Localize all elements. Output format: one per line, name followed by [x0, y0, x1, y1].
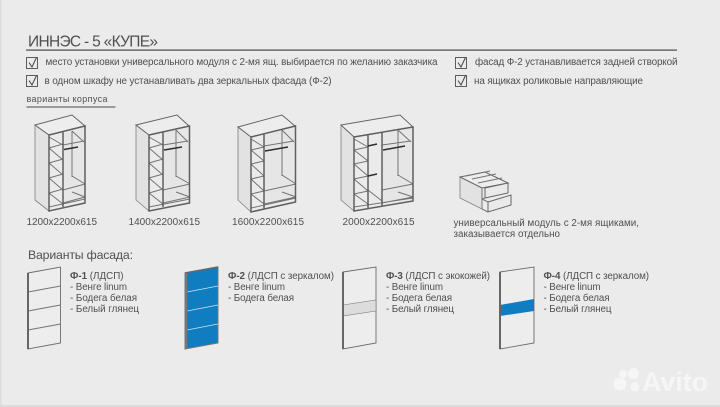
- facade F-2 text: - Бодега белая: [228, 293, 294, 304]
- note: facade F-2 rear: фасад Ф-2 устанавливается задней створкой: [475, 57, 678, 68]
- facade F-1 text: - Белый глянец: [70, 304, 139, 315]
- module caption: [454, 218, 639, 240]
- wardrobe 2000: [341, 115, 413, 211]
- facade F-1 text: - Бодега белая: [70, 293, 137, 304]
- facade F-1 text: Ф-1 (ЛДСП): [70, 271, 124, 282]
- facade F-4 text: - Венге linum: [544, 282, 600, 293]
- facade F-3 text: - Белый глянец: [386, 304, 454, 315]
- title: ИННЭС - 5 «КУПЕ»: [28, 34, 158, 50]
- facade F-2 door: [184, 267, 218, 349]
- facade F-2 text: Ф-2 (ЛДСП с зеркалом): [228, 271, 334, 282]
- watermark: Avito logo: [614, 367, 708, 397]
- note: module position: место установки универсального модуля с 2-мя ящ. выбирается по желанию заказчика: [46, 57, 438, 68]
- facade F-3 text: Ф-3 (ЛДСП с экокожей): [386, 271, 490, 282]
- facade F-4 text: - Белый глянец: [544, 304, 612, 315]
- facade F-2 text: [228, 271, 334, 304]
- wardrobe 1400: [136, 115, 190, 211]
- wardrobe 1600: [238, 115, 296, 212]
- facade F-4 text: - Бодега белая: [544, 293, 610, 304]
- module caption: универсальный модуль с 2-мя ящиками,: [454, 218, 639, 229]
- facade F-4 door: [499, 267, 534, 349]
- module caption: заказывается отдельно: [454, 229, 561, 240]
- watermark: Avito logo: Avito: [642, 367, 708, 397]
- heading: body variants: [26, 94, 116, 108]
- label: 1400 size: 1400x2200x615: [128, 217, 200, 228]
- note: mirror facades: в одном шкафу не устанавливать два зеркальных фасада (Ф-2): [44, 76, 332, 87]
- label: 2000 size: 2000x2200x615: [342, 217, 415, 228]
- facade F-2 text: - Венге linum: [228, 282, 285, 293]
- label: 1200 size: 1200x2200x615: [26, 217, 97, 228]
- universal drawer module: [460, 171, 511, 212]
- facade F-3 text: - Венге linum: [386, 282, 443, 293]
- facade F-4 text: Ф-4 (ЛДСП с зеркалом): [544, 271, 649, 282]
- facade F-3 door: [342, 267, 376, 349]
- heading: facade variants: Варианты фасада:: [28, 248, 133, 262]
- wardrobe 1200: [35, 115, 85, 211]
- facade F-3 text: - Бодега белая: [386, 293, 452, 304]
- heading: body variants: варианты корпуса: [26, 94, 108, 104]
- facade F-1 text: - Венге linum: [70, 282, 127, 293]
- note: roller guides: на ящиках роликовые направляющие: [474, 76, 644, 87]
- label: 1600 size: 1600x2200x615: [232, 217, 304, 228]
- facade F-4 text: [544, 271, 649, 315]
- facade F-1 door: [27, 267, 60, 349]
- facade F-3 text: [386, 271, 490, 315]
- facade F-1 text: [70, 271, 139, 315]
